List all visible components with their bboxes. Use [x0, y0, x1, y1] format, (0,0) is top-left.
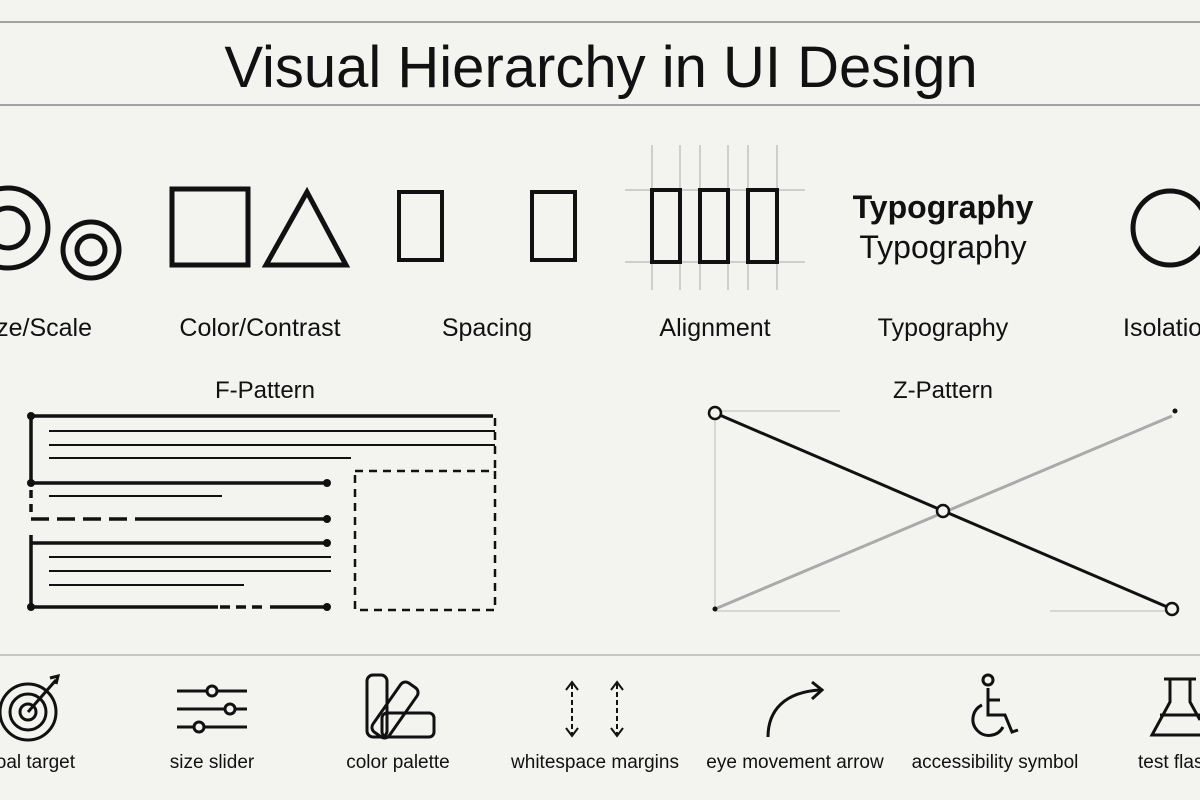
icon: size slider: size slider: [170, 752, 255, 773]
icon: whitespace margins: whitespace margins: [510, 752, 679, 773]
principle: alignment: [625, 145, 805, 342]
icon: accessibility symbol: accessibility symbol: [912, 752, 1078, 773]
icon: eye movement arrow: eye movement arrow: [706, 752, 884, 773]
principle: spacing: [399, 192, 575, 342]
principle: typography: Typography: [878, 314, 1009, 342]
principle: typography: Typography: [853, 189, 1034, 225]
F-pattern diagram: [27, 412, 495, 611]
icon: goal target: [0, 676, 76, 773]
F-pattern heading: F-Pattern: [215, 377, 315, 404]
title: Visual Hierarchy in UI Design: [224, 35, 978, 100]
principle: spacing: Spacing: [442, 314, 532, 342]
Z-pattern diagram: [709, 407, 1178, 615]
icon: size slider: [170, 686, 255, 773]
principle: size/scale: [0, 188, 119, 342]
icon: color palette: [346, 675, 450, 773]
icon: accessibility symbol: [912, 675, 1078, 773]
principle: color/contrast: [172, 189, 346, 342]
Z-pattern heading: Z-Pattern: [893, 377, 993, 404]
principle: typography: Typography: [859, 229, 1027, 265]
principle: color/contrast: Color/Contrast: [179, 314, 341, 342]
principle: isolation: [1123, 191, 1200, 342]
icon: test flask: [1138, 679, 1200, 773]
icon: whitespace margins: [510, 682, 679, 773]
icon: eye movement arrow: [706, 682, 884, 773]
icon: color palette: color palette: [346, 752, 450, 773]
principle: typography: [853, 189, 1034, 342]
principle: alignment: Alignment: [659, 314, 771, 342]
